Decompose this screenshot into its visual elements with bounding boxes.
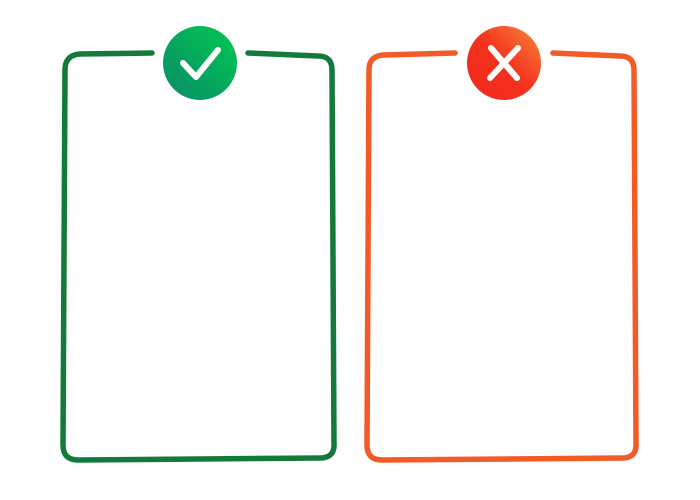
- panel: do (green frame): [63, 53, 334, 460]
- panel: don't (orange frame): [367, 53, 636, 460]
- icon: check badge: [163, 26, 237, 100]
- icon: cross badge: [467, 26, 541, 100]
